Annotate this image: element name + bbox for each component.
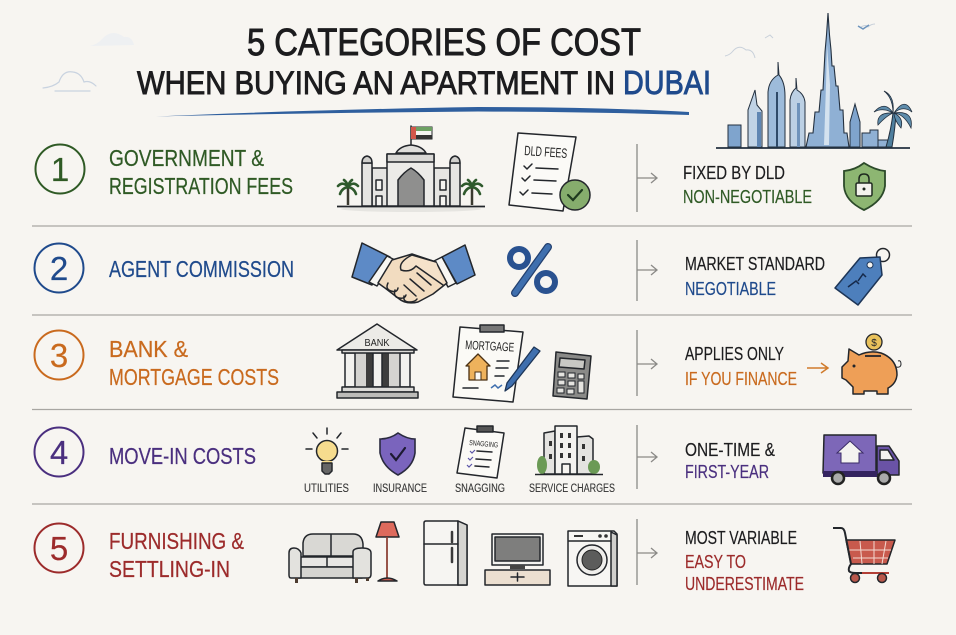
number badge 1: 1	[51, 151, 69, 188]
row 1: government and registration fees	[36, 126, 885, 212]
divider arrow	[637, 144, 657, 212]
icon: light bulb, utilities	[304, 428, 349, 495]
icon: shopping cart	[833, 528, 895, 582]
divider arrow	[637, 330, 657, 396]
icon: apartment building, service charges: SERVICE CHARGES	[529, 483, 615, 495]
heading: bank and mortgage costs: BANK &	[109, 336, 188, 362]
icon: price tag	[835, 248, 890, 305]
icon: purple shield, insurance	[373, 433, 427, 495]
arrow to piggy bank	[807, 363, 828, 373]
title underline brush stroke	[156, 107, 689, 116]
number badge 3: 3	[50, 337, 68, 374]
note: one-time and first-year: FIRST-YEAR	[685, 462, 769, 482]
icon: mortgage clipboard with pen	[453, 325, 540, 402]
icon: floor lamp	[376, 522, 399, 581]
note: market standard, negotiable	[685, 254, 825, 299]
title: WHEN BUYING AN APARTMENT IN	[137, 65, 615, 101]
icon: light bulb, utilities: UTILITIES	[304, 483, 349, 495]
Dubai skyline illustration	[716, 13, 912, 148]
title: DUBAI	[623, 64, 711, 101]
icon: mortgage clipboard with pen: MORTGAGE	[465, 338, 515, 355]
title	[137, 22, 711, 101]
number badge 1	[36, 144, 84, 194]
icon: snagging clipboard	[455, 426, 505, 495]
icon: government building with UAE flag	[337, 126, 485, 212]
heading: government and registration fees	[109, 145, 293, 199]
number badge 4: 4	[50, 434, 68, 471]
icon: piggy bank with coin	[842, 334, 901, 394]
row 5: furnishing and settling-in	[34, 519, 895, 594]
note: most variable, easy to underestimate: EASY TO	[685, 552, 746, 572]
divider arrow	[637, 519, 657, 585]
note: fixed by DLD, non-negotiable: FIXED BY DLD	[683, 163, 785, 183]
number badge 4	[34, 428, 84, 476]
icon: handshake	[352, 243, 475, 303]
row 4: move-in costs	[34, 425, 899, 495]
heading: furnishing and settling-in: SETTLING-IN	[109, 556, 230, 582]
heading: bank and mortgage costs: MORTGAGE COSTS	[109, 364, 279, 390]
note: fixed by DLD, non-negotiable: NON-NEGOTIABLE	[683, 187, 812, 207]
row dividers	[32, 226, 912, 504]
icon: sofa	[289, 534, 371, 583]
note: most variable, easy to underestimate: MOST VARIABLE	[685, 528, 797, 548]
icon: purple shield, insurance: INSURANCE	[373, 483, 427, 495]
icon: moving truck	[823, 435, 899, 484]
number badge 2	[34, 244, 84, 292]
note: applies only if you finance: IF YOU FINANCE	[685, 369, 797, 389]
note: fixed by DLD, non-negotiable	[683, 163, 812, 207]
number badge 5	[34, 524, 84, 572]
number badge 5: 5	[50, 530, 68, 567]
icon: bank building	[337, 324, 418, 398]
number badge 2: 2	[50, 250, 68, 287]
heading: bank and mortgage costs	[109, 336, 279, 390]
icon: shield with padlock	[844, 163, 885, 210]
note: most variable, easy to underestimate	[685, 528, 804, 594]
note: market standard, negotiable: MARKET STANDARD	[685, 254, 825, 274]
icon: calculator	[553, 352, 591, 399]
icon: percent sign	[510, 247, 555, 293]
icon: snagging clipboard: SNAGGING	[469, 438, 499, 450]
heading: agent commission: AGENT COMMISSION	[109, 256, 294, 282]
heading: government and registration fees: REGISTRATION FEES	[109, 173, 293, 199]
icon: snagging clipboard: SNAGGING	[455, 483, 505, 495]
icon: DLD fees checklist	[509, 133, 590, 211]
note: applies only if you finance	[685, 344, 797, 389]
number badge 3	[34, 330, 84, 380]
decorative clouds left	[43, 33, 134, 91]
heading: government and registration fees: GOVERNMENT &	[109, 145, 264, 171]
icon: apartment building, service charges	[529, 426, 615, 495]
icon: television on stand	[485, 534, 550, 585]
note: market standard, negotiable: NEGOTIABLE	[685, 279, 776, 299]
icon: piggy bank with coin: $	[871, 338, 877, 349]
row 2: agent commission	[34, 240, 890, 305]
note: one-time and first-year: ONE-TIME &	[685, 440, 775, 460]
title: 5 CATEGORIES OF COST	[247, 22, 641, 64]
note: applies only if you finance: APPLIES ONLY	[685, 344, 784, 364]
divider arrow	[637, 240, 657, 301]
note: most variable, easy to underestimate: UNDERESTIMATE	[685, 574, 804, 594]
heading: furnishing and settling-in: FURNISHING &	[109, 528, 244, 554]
divider arrow	[637, 425, 657, 489]
heading: furnishing and settling-in	[109, 528, 244, 582]
note: one-time and first-year	[685, 440, 775, 482]
row 3: bank and mortgage costs	[34, 324, 901, 402]
icon: washing machine	[568, 531, 617, 586]
icon: fridge	[424, 521, 467, 585]
heading: move-in costs: MOVE-IN COSTS	[109, 443, 256, 469]
icon: bank building: BANK	[364, 338, 390, 349]
icon: DLD fees checklist: DLD FEES	[524, 143, 568, 161]
